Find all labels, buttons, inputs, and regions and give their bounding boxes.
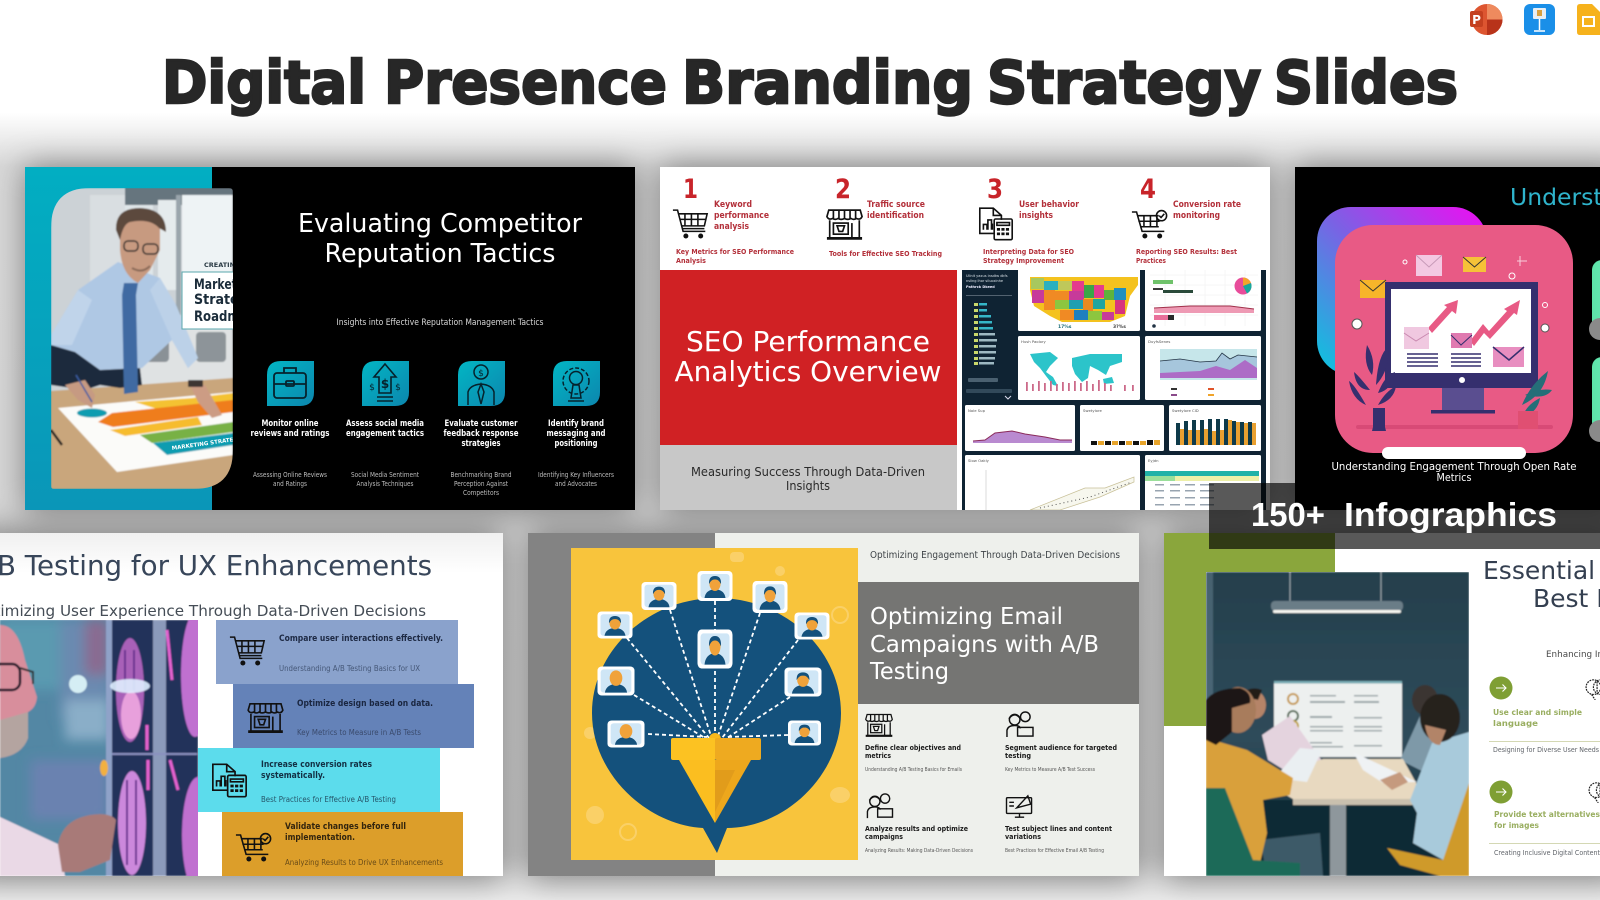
item: clear language <box>1489 676 1600 754</box>
item: test subject lines: Test subject lines and content <box>1005 825 1113 833</box>
panel: A/B Testing for UX Enhancements slide <box>0 533 503 893</box>
step: increase <box>198 748 440 812</box>
SEO step 3: Strategy Improvement <box>983 257 1065 265</box>
caption: Metrics <box>1436 471 1472 484</box>
icon: money arrow: $ <box>381 377 389 391</box>
item: define objectives <box>865 714 962 773</box>
photo: scientist viewing brain scans <box>0 620 198 876</box>
dashboard sidebar: Ullnit yaxus insdtw dkfs <box>966 274 1008 278</box>
panel: SEO Performance Analytics Overview slide <box>660 167 1270 515</box>
dashboard panel: line chart: Slow Oakly <box>968 458 990 463</box>
dashboard panel: trends and pie <box>1145 268 1261 331</box>
step descriptions: Competitors <box>463 489 499 497</box>
caption: Understanding Engagement Through Open Rate <box>1332 460 1577 473</box>
SEO step 1: 1 <box>683 174 698 205</box>
side cards <box>1589 260 1600 442</box>
step: compare: Understanding A/B Testing Basics for UX <box>279 664 421 673</box>
panel: Essential Accessibility Best Practices slide <box>1164 533 1600 876</box>
SEO step 4: Reporting SEO Results: Best <box>1136 248 1238 256</box>
caption <box>1332 462 1576 481</box>
step descriptions: Analysis Techniques <box>356 480 414 488</box>
banner: 150+ Infographics <box>1209 483 1600 549</box>
SEO step 2: Traffic source <box>867 200 925 210</box>
step labels: Identify brand <box>548 419 604 429</box>
icon: businessperson <box>458 361 505 406</box>
item: text alternatives <box>1489 780 1600 857</box>
SEO step 4: Conversion rate <box>1173 200 1241 210</box>
step: validate: implementation. <box>285 833 355 843</box>
dashboard panel: world map <box>1018 336 1140 400</box>
audience avatars <box>598 571 830 748</box>
funnel pin <box>671 733 761 823</box>
icon: money arrow: $ <box>369 383 375 393</box>
item: clear language: language <box>1493 719 1539 728</box>
SEO step 4: 4 <box>1140 174 1156 205</box>
step labels: engagement tactics <box>346 429 424 439</box>
dashboard panel: US map: 3?%s <box>1113 324 1126 330</box>
SEO step 4 <box>1132 174 1241 265</box>
icon: PowerPoint: P <box>1472 13 1481 27</box>
step descriptions <box>253 471 614 497</box>
dashboard sidebar: nsling lhor siluoxinhe <box>966 279 1003 283</box>
banner: 150+ Infographics: 150+ <box>1251 496 1325 533</box>
SEO step 3 <box>980 174 1080 265</box>
grey subtitle block <box>660 445 957 510</box>
item: segment audience: Segment audience for targeted <box>1005 744 1117 752</box>
dashboard panel: line chart <box>965 455 1140 515</box>
item: test subject lines <box>1005 796 1113 854</box>
panel: Evaluating Competitor Reputation Tactics slide <box>25 167 635 510</box>
step: optimize: Optimize design based on data. <box>297 699 433 709</box>
analytics dashboard image <box>962 268 1266 515</box>
item: text alternatives: for images <box>1494 821 1539 830</box>
item: segment audience: Key Metrics to Measure A/B Test Success <box>1005 767 1095 773</box>
step labels <box>250 419 606 449</box>
photo: man marking up a marketing strategy roadmap <box>51 188 233 489</box>
dashboard panel: world map: Hush Paolory <box>1021 339 1047 344</box>
item: analyze results <box>865 794 973 854</box>
step: compare <box>216 620 458 684</box>
item: analyze results: Analyzing Results: Making Data-Driven Decisions <box>865 848 973 854</box>
red title block: SEO Performance <box>686 326 930 358</box>
illustration: email analytics monitor <box>1317 207 1573 459</box>
title: Presence <box>384 48 667 117</box>
grey title block: Campaigns with A/B <box>870 630 1099 658</box>
step descriptions: and Advocates <box>555 480 597 488</box>
dashboard panel: data table: Eyjdn <box>1148 458 1159 463</box>
step labels: Evaluate customer <box>444 419 518 429</box>
dashboard panel: US map: 17%s <box>1058 324 1072 330</box>
grey title block: Testing <box>869 657 949 685</box>
SEO step 1: Key Metrics for SEO Performance <box>676 248 794 256</box>
step labels: Assess social media <box>346 419 424 429</box>
icon: businessperson: $ <box>478 369 484 379</box>
SEO step 4: monitoring <box>1173 211 1220 221</box>
dashboard panel: US map <box>1018 268 1140 331</box>
slide title <box>1485 560 1600 608</box>
grey title block <box>858 582 1139 704</box>
step descriptions: Benchmarking Brand <box>450 471 512 479</box>
item: define objectives: metrics <box>865 752 891 760</box>
kicker text: Optimizing Engagement Through Data-Driven Decisions <box>870 550 1120 561</box>
slide title: Reputation Tactics <box>324 239 556 269</box>
SEO step 1: performance <box>714 211 769 221</box>
step: validate <box>222 812 463 876</box>
step labels: feedback response <box>444 429 519 439</box>
SEO step 1 <box>673 174 794 265</box>
item: segment audience: testing <box>1005 752 1031 760</box>
banner: 150+ Infographics: Infographics <box>1344 496 1557 533</box>
dashboard panel: data table <box>1145 455 1261 515</box>
step descriptions: Social Media Sentiment <box>351 471 419 479</box>
step labels: messaging and <box>546 429 606 439</box>
photo: man marking up a marketing strategy roadmap: Roadmap <box>194 309 256 325</box>
dashboard panel: tall bars: Swetylore CID <box>1172 408 1199 413</box>
step: optimize <box>233 684 474 748</box>
photo: man marking up a marketing strategy roadmap: Strategy <box>194 292 256 308</box>
step descriptions: Identifying Key Influencers <box>538 471 614 479</box>
step labels: positioning <box>554 439 598 449</box>
SEO step 1: analysis <box>714 222 749 232</box>
title <box>162 48 1458 117</box>
dashboard sidebar: Pathrck Dkeed <box>966 285 995 289</box>
dashboard panel: purple area chart <box>965 405 1075 451</box>
dashboard panel: small bars: Swetylore <box>1083 408 1102 413</box>
dashboard panel: stacked area chart <box>1145 336 1261 400</box>
title: Digital <box>162 48 366 117</box>
icon: money arrow: $ <box>395 383 401 393</box>
step descriptions: Perception Against <box>454 480 508 488</box>
icon: Google Slides <box>1577 4 1600 35</box>
step labels: reviews and ratings <box>250 429 330 439</box>
step: increase: Best Practices for Effective A/B Testing <box>261 795 396 804</box>
panel: Understanding Email Open Rates slide <box>1295 167 1600 510</box>
dashboard panel: tall bars <box>1169 405 1261 451</box>
SEO step 2: identification <box>867 211 924 221</box>
item: define objectives: Understanding A/B Testing Basics for Emails <box>865 767 962 773</box>
grey subtitle block: Measuring Success Through Data-Driven <box>691 464 925 479</box>
green accent block <box>1164 533 1335 726</box>
grey title block: Optimizing Email <box>870 602 1063 630</box>
step descriptions: and Ratings <box>273 480 307 488</box>
item: clear language: Use clear and simple <box>1493 708 1583 717</box>
dashboard panel: small bars <box>1080 405 1164 451</box>
step: optimize: Key Metrics to Measure in A/B Tests <box>297 728 421 737</box>
title: Slides <box>1274 48 1458 117</box>
step labels: Monitor online <box>262 419 319 429</box>
item: analyze results: campaigns <box>865 833 903 841</box>
slide subtitle: Insights into Effective Reputation Management Tactics <box>336 318 544 328</box>
item: segment audience <box>1005 712 1117 773</box>
photo: man marking up a marketing strategy roadmap: Marketing <box>194 277 256 293</box>
photo: team meeting <box>1206 572 1469 876</box>
dashboard panel: purple area chart: Nole Sup <box>968 408 986 413</box>
dashboard sidebar <box>966 274 1012 399</box>
icon: briefcase <box>267 361 314 406</box>
step: validate: Validate changes before full <box>285 822 406 832</box>
slide drop shadows <box>0 165 1600 880</box>
red title block: Analytics Overview <box>674 356 942 388</box>
SEO step 3: User behavior <box>1019 200 1080 210</box>
item: define objectives: Define clear objectives and <box>865 744 961 752</box>
illustration: audience funnel <box>571 548 858 860</box>
red title block <box>660 270 957 445</box>
SEO step 3: insights <box>1019 211 1053 221</box>
slide title: Evaluating Competitor <box>298 209 582 239</box>
title: Branding <box>682 48 973 117</box>
step descriptions: Assessing Online Reviews <box>253 471 327 479</box>
icon: money arrow <box>362 361 409 406</box>
SEO step 1: Analysis <box>676 257 706 265</box>
title: Strategy <box>987 48 1261 117</box>
grey subtitle block: Insights <box>786 478 830 493</box>
step: increase: systematically. <box>261 771 325 781</box>
SEO step 2: 2 <box>835 174 851 205</box>
step: compare: Compare user interactions effectively. <box>279 634 443 644</box>
item: test subject lines: Best Practices for Effective Email A/B Testing <box>1005 848 1104 854</box>
icon: gear and chess piece <box>553 361 600 406</box>
SEO step 3: 3 <box>987 174 1003 205</box>
icon: PowerPoint <box>1470 4 1502 35</box>
SEO step 2: Tools for Effective SEO Tracking <box>829 250 942 258</box>
dashboard panel: stacked area chart: DuyfsSenes <box>1148 339 1170 344</box>
item: analyze results: Analyze results and optimize <box>865 825 968 833</box>
step: validate: Analyzing Results to Drive UX Enhancements <box>285 858 443 867</box>
slide title <box>298 209 582 269</box>
panel: Optimizing Email Campaigns slide <box>528 533 1139 876</box>
SEO step 4: Practices <box>1136 257 1166 265</box>
SEO step 2 <box>827 174 942 258</box>
SEO step 3: Interpreting Data for SEO <box>983 248 1074 256</box>
photo: man marking up a marketing strategy roadmap: MARKETING STRATEGY <box>171 436 243 452</box>
step: increase: Increase conversion rates <box>261 760 372 770</box>
step labels: strategies <box>462 439 500 449</box>
photo: man marking up a marketing strategy roadmap: CREATING <box>204 261 240 269</box>
SEO step 1: Keyword <box>714 200 752 210</box>
icon: Keynote <box>1524 4 1555 35</box>
item: test subject lines: variations <box>1005 833 1041 841</box>
